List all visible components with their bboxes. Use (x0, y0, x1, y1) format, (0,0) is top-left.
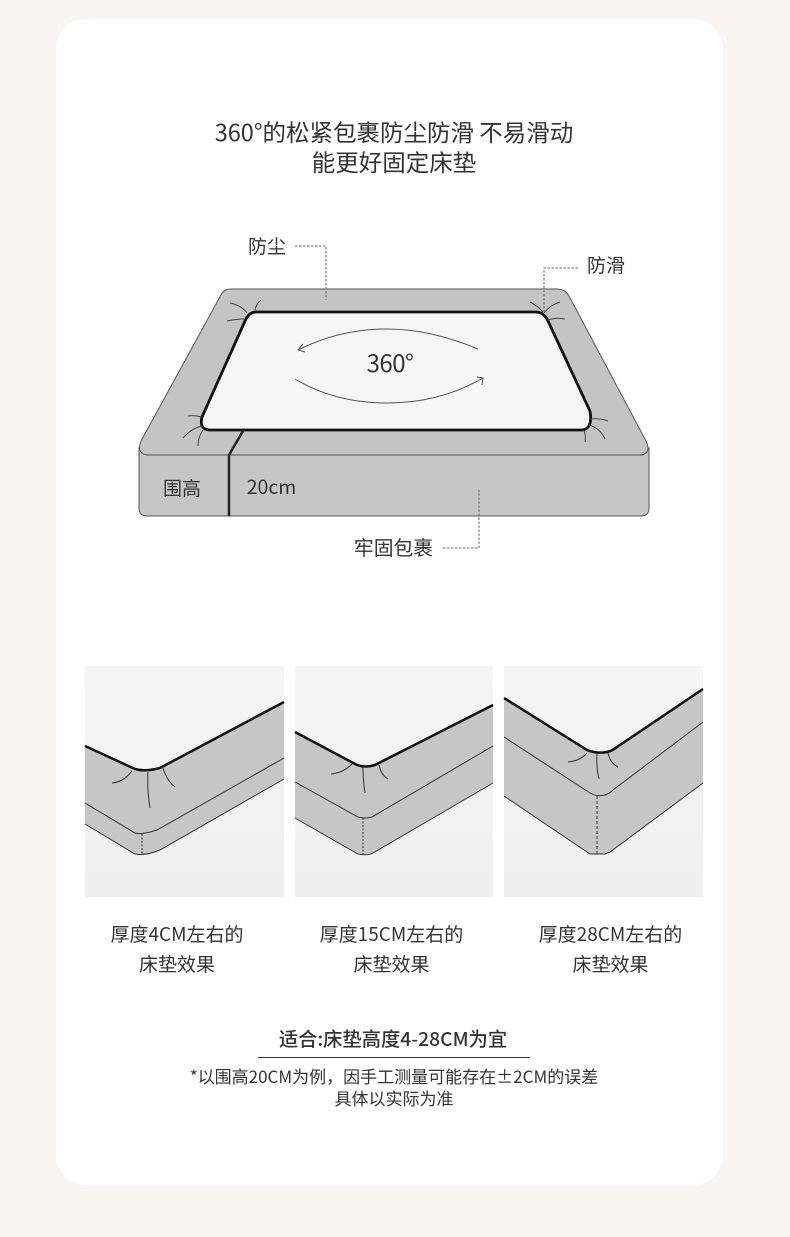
caption: 28cm: 床垫效果 (572, 950, 649, 977)
caption: 4cm: 厚度4CM左右的 (110, 920, 244, 947)
mattress front side (139, 448, 649, 516)
seam (229, 431, 243, 516)
mattress diagram (139, 232, 649, 561)
caption: 4cm: 床垫效果 (139, 950, 215, 977)
rotation arrows (295, 329, 483, 403)
caption: 15cm: 床垫效果 (353, 950, 430, 977)
elastic folds (183, 300, 608, 446)
footnote (190, 1063, 598, 1110)
mattress top surface (140, 289, 648, 455)
caption: 4cm (110, 920, 244, 977)
label: 20cm: 20cm (247, 471, 296, 500)
title: 能更好固定床垫 (312, 144, 476, 178)
footnote: *以围高20CM为例，因手工测量可能存在±2CM的误差 (190, 1063, 598, 1088)
caption: 28cm (539, 920, 682, 977)
callout: anti-slip: 防滑 (587, 251, 625, 278)
caption: 28cm: 厚度28CM左右的 (539, 920, 682, 947)
summary underline (258, 1056, 530, 1058)
fitted sheet inner opening (201, 312, 591, 430)
panel: 28cm thickness (504, 666, 703, 897)
callout: firm wrap (354, 490, 479, 561)
callout: dustproof: 防尘 (248, 232, 286, 259)
label: 360 degrees: 360° (367, 344, 413, 379)
callout: firm wrap: 牢固包裹 (354, 532, 433, 561)
background card (56, 19, 723, 1185)
label: height: 围高 (163, 474, 201, 501)
caption: 15cm (320, 920, 463, 977)
callout: anti-slip (544, 251, 625, 312)
title (215, 114, 573, 178)
summary heading: 适合:床垫高度4-28CM为宜 (279, 1024, 507, 1052)
callout: dustproof (248, 232, 326, 300)
title: 360°的松紧包裹防尘防滑 不易滑动 (215, 114, 573, 148)
panel: 4cm thickness (85, 666, 284, 897)
footnote: 具体以实际为准 (334, 1085, 454, 1110)
caption: 15cm: 厚度15CM左右的 (320, 920, 463, 947)
panel: 15cm thickness (295, 666, 493, 897)
